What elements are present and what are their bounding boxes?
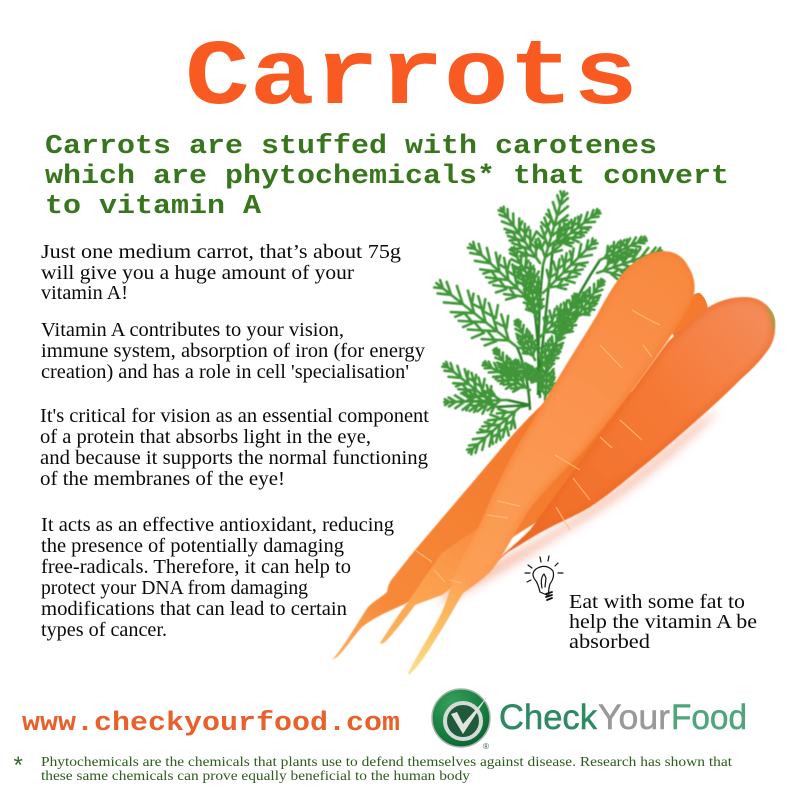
text block: antioxidant: It acts as an effective antioxidant, reducing [41, 515, 394, 536]
text block: antioxidant: free-radicals. Therefore, it can help to [41, 557, 351, 578]
footnote asterisk: * [11, 755, 25, 782]
text block: antioxidant: modifications that can lead to certain [41, 599, 347, 620]
back carrot [332, 360, 640, 660]
text block: vitamin A uses: immune system, absorption of iron (for energy [41, 341, 425, 362]
text block: vision: and because it supports the normal functioning [40, 448, 428, 469]
back carrot top stub [670, 293, 708, 345]
subheading [45, 131, 729, 221]
carrot tip colour [766, 305, 775, 332]
text block: vitamin A uses: Vitamin A contributes to your vision, [41, 320, 344, 341]
icon: light bulb [525, 556, 563, 600]
text block: intro: vitamin A! [41, 283, 128, 304]
illustration: carrots with leafy tops [332, 187, 775, 674]
footnote: Phytochemicals are the chemicals that plants use to defend themselves against disease. Research has shown that [41, 755, 732, 770]
callout: eat with fat [569, 592, 757, 653]
logo wordmark: Food [671, 698, 747, 737]
callout: eat with fat: help the vitamin A be [569, 612, 757, 633]
carrot surface marks [415, 310, 660, 583]
logo badge [432, 689, 490, 747]
right carrot [498, 296, 776, 562]
middle carrot root [380, 515, 500, 644]
text block: vision: of a protein that absorbs light in the eye, [40, 427, 371, 448]
title: Carrots [185, 26, 638, 131]
logo wordmark [499, 698, 747, 737]
text block: antioxidant [41, 515, 394, 641]
subheading: Carrots are stuffed with carotenes [45, 131, 657, 161]
text block: vision: It's critical for vision as an essential component [40, 406, 430, 427]
text block: vitamin A uses [41, 320, 425, 383]
text block: vision: of the membranes of the eye! [40, 469, 285, 490]
carrot shadow [440, 410, 720, 605]
text block: intro: Just one medium carrot, that’s about 75g [41, 242, 401, 263]
text block: antioxidant: the presence of potentially damaging [41, 536, 344, 557]
footnote [41, 755, 732, 784]
text block: intro: will give you a huge amount of your [41, 263, 355, 284]
callout: eat with fat: Eat with some fat to [569, 592, 745, 613]
text block: antioxidant: protect your DNA from damaging [41, 578, 308, 599]
logo: CheckYourFood [432, 689, 747, 751]
registered mark: ® [483, 742, 489, 751]
carrot leaves [423, 187, 666, 463]
logo wordmark: Check [499, 698, 597, 737]
subheading: to vitamin A [45, 191, 261, 221]
callout: eat with fat: absorbed [569, 632, 650, 653]
website url: www.checkyourfood.com [22, 709, 400, 739]
text block: vision [40, 406, 430, 490]
front carrot [408, 251, 695, 674]
text block: antioxidant: types of cancer. [41, 620, 167, 641]
logo wordmark: Your [598, 698, 670, 737]
text block: intro [41, 242, 401, 304]
text block: vitamin A uses: creation) and has a role in cell 'specialisation' [41, 362, 409, 383]
subheading: which are phytochemicals* that convert [45, 161, 729, 191]
footnote: these same chemicals can prove equally beneficial to the human body [41, 769, 470, 784]
